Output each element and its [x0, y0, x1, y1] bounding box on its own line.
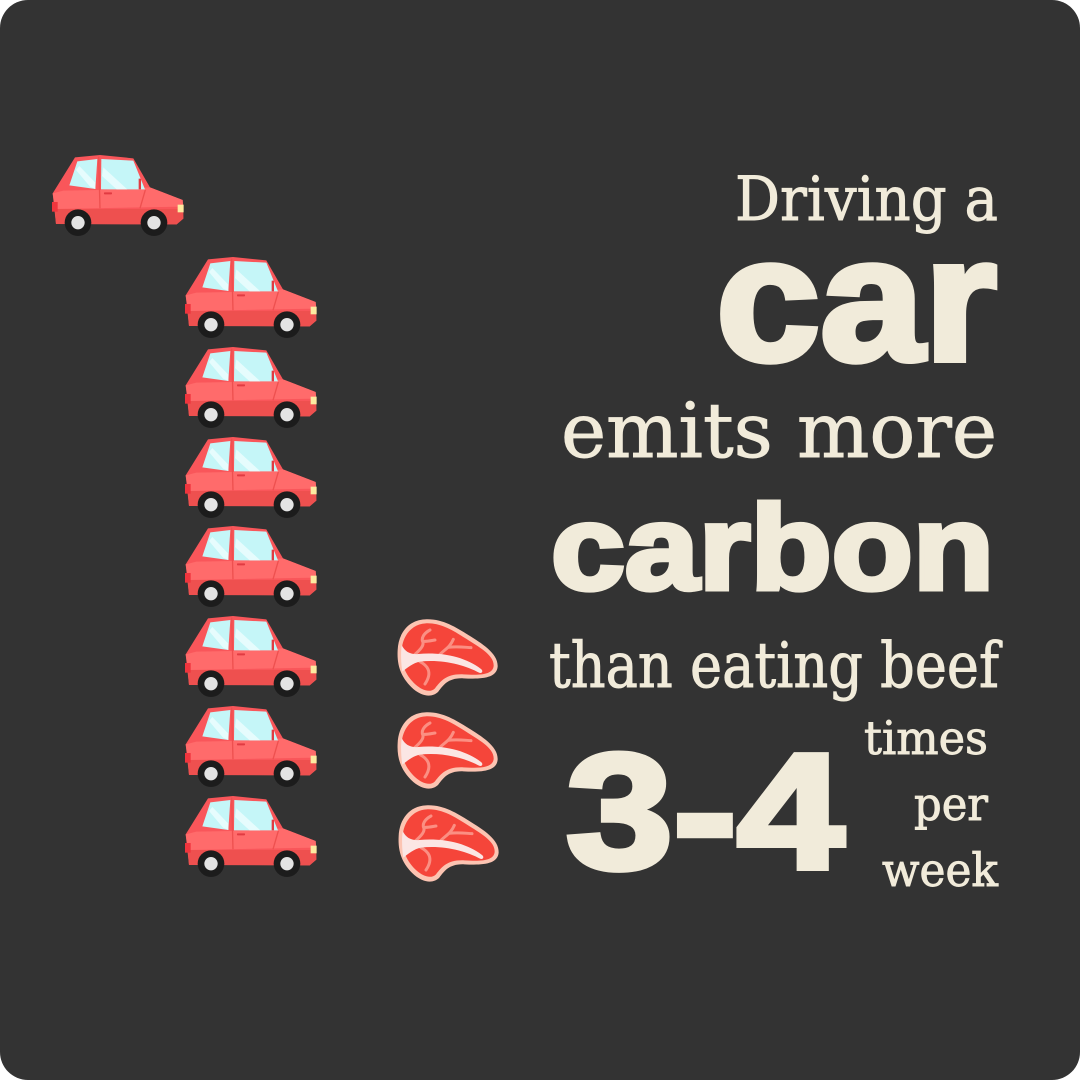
icon: beef steak stack of three — [398, 619, 499, 882]
text: than eating beef: than eating beef — [549, 629, 1003, 702]
text: emits more: emits more — [561, 386, 997, 475]
icon: car stack of seven — [185, 257, 317, 877]
heading: car: car — [716, 202, 997, 398]
heading: carbon: carbon — [551, 481, 994, 615]
text: week: week — [882, 843, 999, 897]
text: per: per — [914, 777, 988, 831]
text: Driving a: Driving a — [735, 164, 998, 235]
icon: lone car — [52, 155, 184, 236]
stat: 3-4: 3-4 — [566, 720, 844, 903]
text: times: times — [864, 711, 988, 765]
